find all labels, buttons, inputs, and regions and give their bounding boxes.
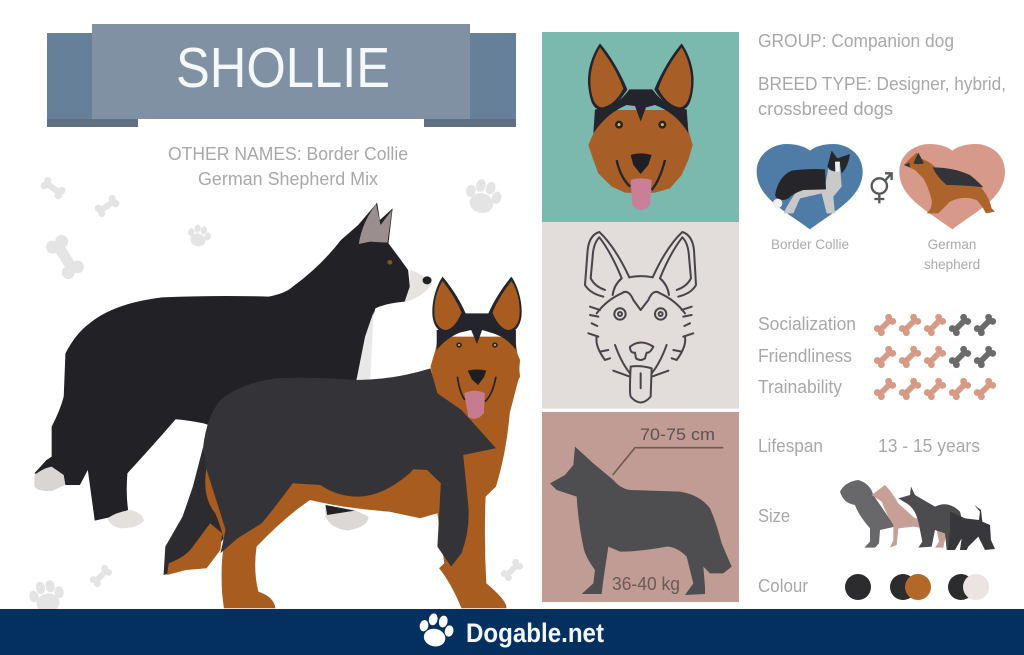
icon: male-female symbol [872,173,892,203]
colour swatches [845,574,989,600]
panel: colour head [542,32,739,222]
panel: size silhouette [542,412,739,602]
group and breed type text: crossbreed dogs [758,99,893,119]
icon: paw [416,611,456,650]
illustration: border collie cross [34,203,432,531]
ear and forehead markings [432,277,466,333]
rating labels: Friendliness [758,346,852,366]
parent breed labels: shepherd [924,257,980,272]
lifespan: Lifespan [758,436,823,456]
heart: german shepherd [899,144,1005,229]
parent breed labels: German [928,237,976,252]
title: SHOLLIE [176,36,390,100]
rating labels: Trainability [758,377,842,397]
weight label: 36-40 kg [612,574,680,594]
parent breed labels: Border Collie [771,237,849,252]
rating bones: trainability [872,376,998,402]
head [432,337,520,423]
parent breed labels [771,237,980,272]
watermark bones and paws [27,176,525,615]
footer brand: Dogable.net [466,618,604,648]
silhouette [550,447,732,595]
brown body and legs [205,343,520,608]
height label: 70-75 cm [640,425,715,444]
other names text [168,144,408,189]
group and breed type text: BREED TYPE: Designer, hybrid, [758,74,1006,94]
rear dark leg [164,447,227,575]
illustration: shollie dog [164,277,522,608]
other names text: OTHER NAMES: Border Collie [168,144,408,164]
rating labels: Socialization [758,314,856,334]
rating bones: socialization [872,312,998,338]
panel: line-art head [542,222,739,409]
title banner [47,24,516,127]
lifespan: 13 - 15 years [878,436,980,456]
rating bones: friendliness [872,344,998,370]
footer bar [0,609,1024,655]
rating labels [758,314,856,397]
colour label: Colour [758,576,808,596]
group and breed type text [758,31,1006,119]
height line [613,448,723,475]
lifespan [758,436,980,456]
size label: Size [758,506,790,526]
heart: border collie [757,144,863,229]
group and breed type text: GROUP: Companion dog [758,31,954,51]
other names text: German Shepherd Mix [198,169,378,189]
parent breeds [757,144,1005,229]
ratings [758,312,998,402]
dark coat [203,368,496,567]
size comparison dogs [840,480,995,550]
